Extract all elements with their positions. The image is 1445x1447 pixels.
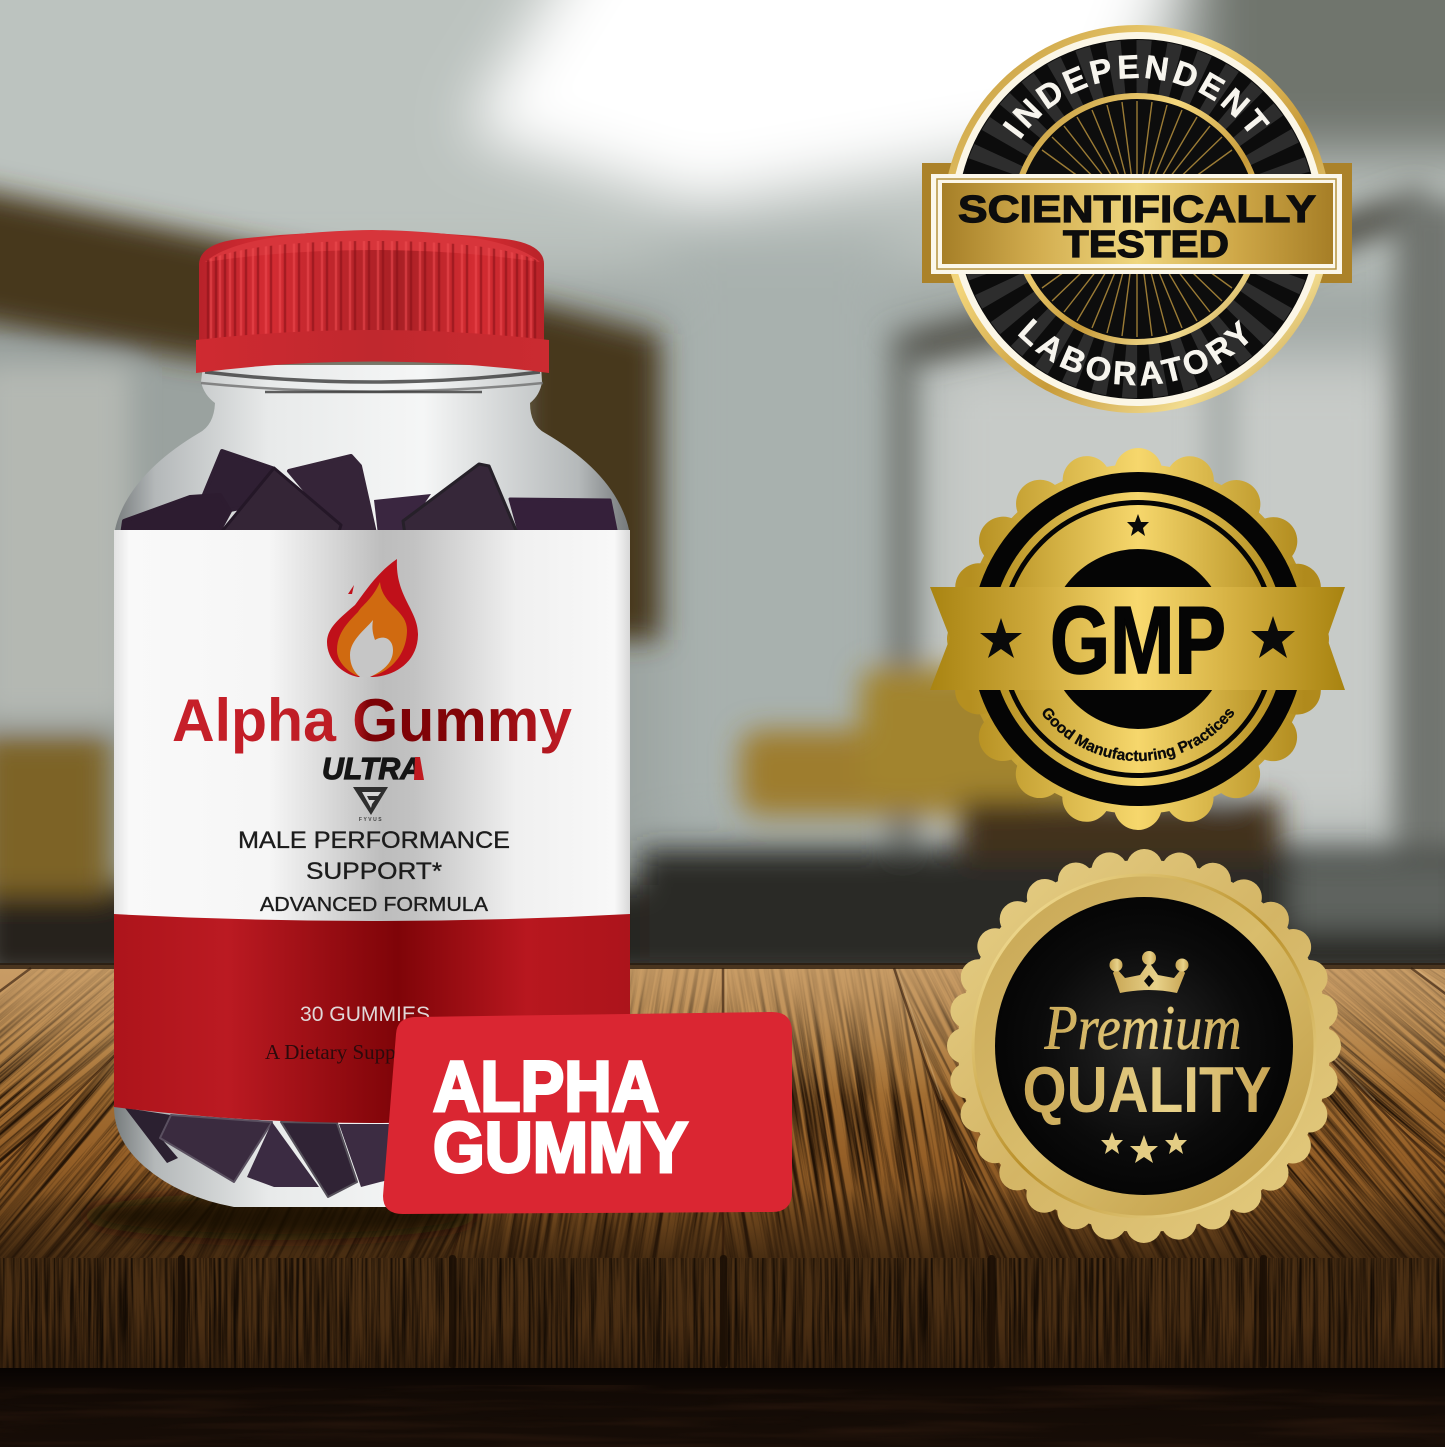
icon: star (1127, 514, 1149, 536)
red alpha gummy tag: ALPHA (433, 1048, 659, 1127)
scalloped seal (963, 464, 1313, 814)
neck rings (201, 372, 543, 392)
badge: GMP (930, 448, 1345, 830)
ultra wordmark: ULTRA (322, 751, 422, 786)
red alpha gummy tag: GUMMY (433, 1109, 688, 1188)
badge: premium quality (958, 860, 1330, 1232)
icon: fyvus logo (353, 787, 388, 823)
gold ribbon: GMP (1050, 587, 1226, 694)
label red band (114, 914, 630, 1123)
badge: scientifically tested (922, 25, 1352, 413)
independent arc text: INDEPENDENT (1002, 54, 1270, 139)
cap band (196, 330, 549, 373)
label white panel (114, 530, 630, 1123)
back ribbon (922, 163, 1352, 283)
good manufacturing practices arc text: Good Manufacturing Practices (1042, 708, 1234, 762)
gummies top (122, 451, 617, 535)
gold ribbon (931, 174, 1342, 274)
black rings (971, 472, 1305, 806)
icon: fyvus logo: FYVUS (359, 817, 383, 823)
wooden table top (0, 963, 1445, 1447)
red alpha gummy tag (383, 1012, 792, 1214)
quality: QUALITY (1022, 1053, 1272, 1126)
table front face (0, 1255, 1445, 1368)
bottle shadow on table (80, 1192, 480, 1240)
scalloped seal (958, 860, 1330, 1232)
sunburst rays (1042, 101, 1232, 337)
gummy count: 30 GUMMIES (300, 1003, 430, 1026)
label text: MALE PERFORMANCE (238, 827, 510, 854)
premium script: Premium (1044, 992, 1242, 1063)
brand name: Alpha Gummy (172, 687, 573, 754)
icon: flame logo (327, 559, 418, 677)
dietary supplement note: A Dietary Supplement (265, 1040, 453, 1064)
cap (196, 230, 549, 373)
icon: crown (1110, 951, 1188, 993)
label text: ADVANCED FORMULA (260, 894, 489, 916)
product bottle (114, 230, 630, 1207)
icon: three stars (1101, 1132, 1187, 1163)
glass jar (114, 365, 630, 1207)
gold ribbon: TESTED (1063, 224, 1229, 266)
gold ribbon: SCIENTIFICALLY (958, 189, 1316, 231)
label text: SUPPORT* (306, 858, 442, 885)
table edge (0, 1368, 1445, 1447)
laboratory arc text: LABORATORY (1018, 318, 1248, 386)
seal rings (943, 25, 1331, 413)
label text (238, 827, 510, 916)
gummies bottom (125, 1108, 390, 1197)
blurred room background (0, 0, 1445, 980)
gold ribbon (930, 587, 1345, 694)
gold rings (973, 875, 1315, 1217)
